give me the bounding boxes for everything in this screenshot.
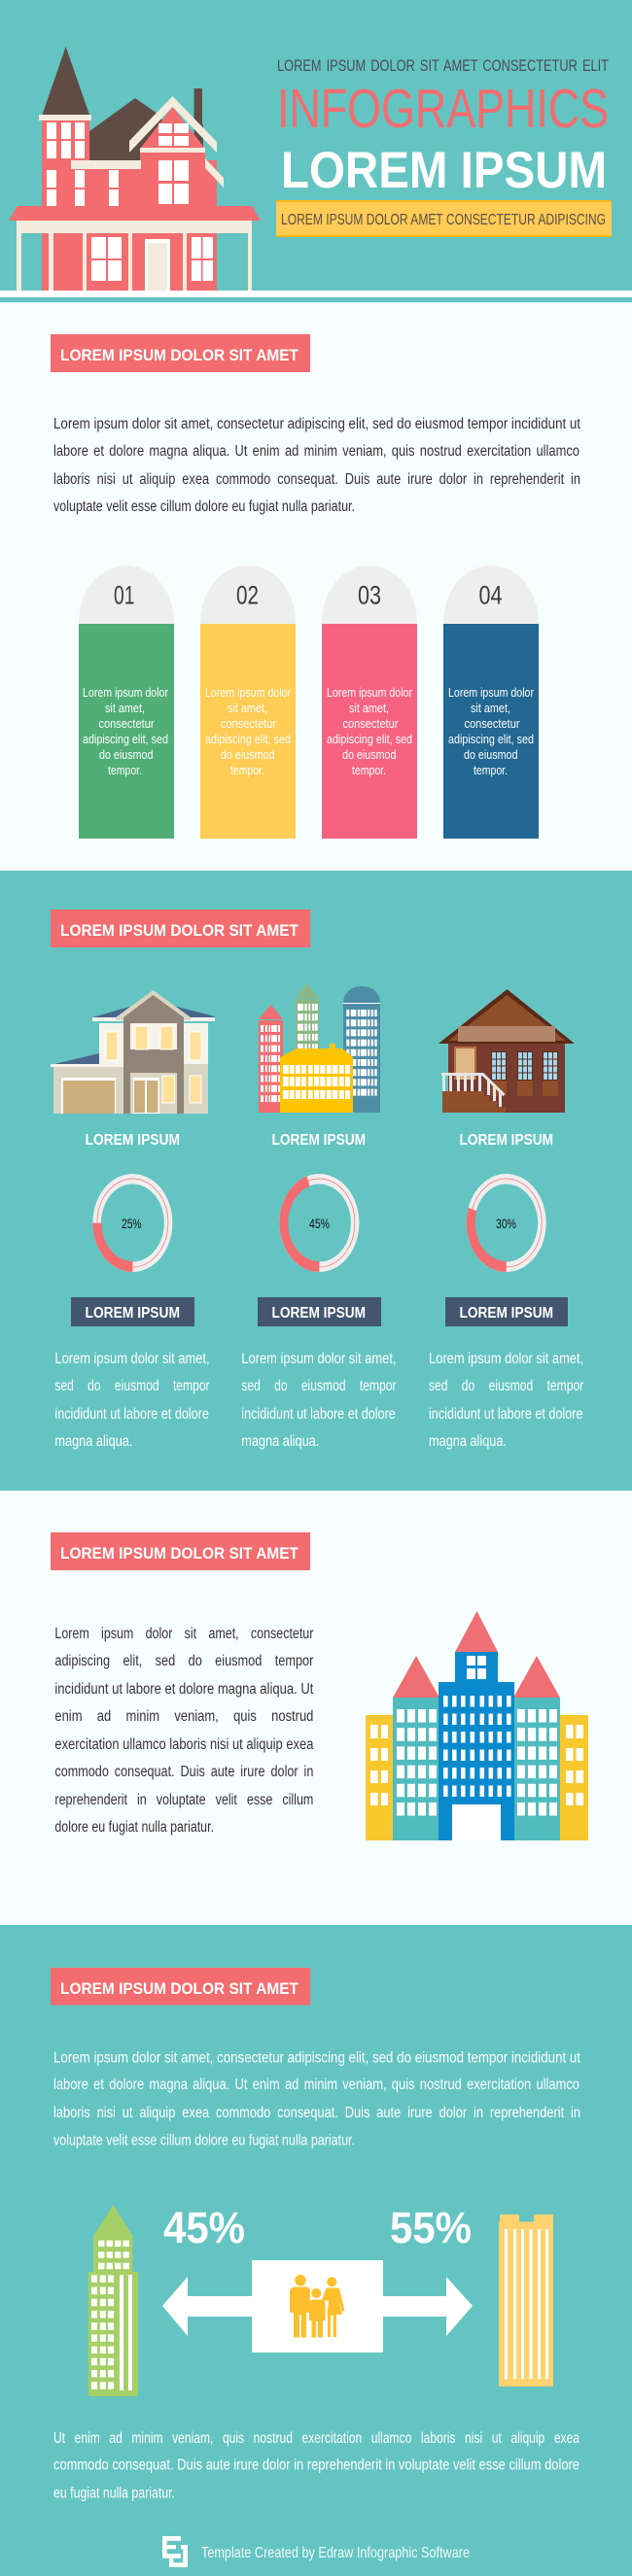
card 03: Lorem ipsum dolor — [327, 686, 412, 700]
card 03 — [322, 566, 417, 839]
card 01 — [79, 566, 174, 839]
card 04: 04 — [478, 581, 502, 610]
illustration: brown house — [439, 989, 575, 1113]
section 3 text block: exercitation ullamco laboris nisi ut aliquip exea — [54, 1736, 314, 1753]
closing text block — [53, 2430, 579, 2501]
card 03: consectetur — [342, 717, 399, 731]
donut chart 45% — [279, 1174, 359, 1272]
text column 3 — [429, 1351, 583, 1450]
section 3 heading: LOREM IPSUM DOLOR SIT AMET — [60, 1545, 298, 1563]
section 1 text block: voluptate velit esse cillum dolore eu fugiat nulla pariatur. — [53, 498, 355, 515]
donut chart 25% — [92, 1174, 172, 1272]
card 02: Lorem ipsum dolor — [205, 686, 291, 700]
illustration: suburban house — [51, 990, 215, 1114]
card 04: consectetur — [465, 717, 519, 731]
donut chart 25%: 25% — [122, 1216, 142, 1231]
card 01: tempor. — [108, 764, 142, 777]
section 3 text block: adipiscing elit, sed do eiusmod tempor — [54, 1653, 313, 1669]
text column 3: sed do eiusmod tempor — [429, 1378, 583, 1394]
dark label button 1: LOREM IPSUM — [86, 1305, 180, 1322]
dark label button 3 — [445, 1297, 568, 1326]
closing text block: eu fugiat nulla pariatur. — [53, 2486, 175, 2501]
section 4 heading — [51, 1968, 310, 2006]
section 2 heading — [51, 910, 310, 947]
section 3 text block: enim ad minim veniam, quis nostrud — [54, 1708, 313, 1725]
text column 1 — [54, 1351, 210, 1450]
text column 1: incididunt ut labore et dolore — [54, 1406, 209, 1423]
double arrow with centre box — [162, 2260, 473, 2353]
illustration: city towers — [259, 983, 380, 1113]
text column 2: Lorem ipsum dolor sit amet, — [241, 1351, 397, 1367]
donut chart 30%: 30% — [496, 1216, 516, 1231]
dark label button 2 — [258, 1297, 381, 1326]
text column 1: Lorem ipsum dolor sit amet, — [54, 1351, 210, 1367]
illustration: red house — [9, 47, 261, 291]
card 04 — [443, 566, 539, 839]
text column 3: Lorem ipsum dolor sit amet, — [429, 1351, 583, 1367]
card 03: 03 — [358, 581, 381, 610]
text column 2: sed do eiusmod tempor — [241, 1378, 397, 1394]
card 02 — [200, 566, 296, 839]
card 01: consectetur — [99, 717, 154, 731]
card 03: sit amet, — [349, 702, 389, 715]
section 3 text block: incididunt ut labore et dolore magna aliqua. Ut — [54, 1681, 314, 1698]
percentage 55%: 55% — [390, 2203, 472, 2252]
card 04: tempor. — [474, 764, 508, 777]
text column 2: magna aliqua. — [241, 1433, 319, 1450]
text column 1: sed do eiusmod tempor — [54, 1378, 210, 1394]
section 1 heading — [51, 334, 310, 372]
section 4 heading: LOREM IPSUM DOLOR SIT AMET — [60, 1980, 298, 1998]
labels under illustrations: LOREM IPSUM — [459, 1132, 553, 1149]
card 02: 02 — [236, 581, 259, 610]
section 3 text block — [54, 1626, 314, 1836]
donut chart 30% — [467, 1174, 546, 1272]
text column 1: magna aliqua. — [54, 1433, 132, 1450]
card 03: tempor. — [352, 764, 386, 777]
dark label button 3: LOREM IPSUM — [459, 1305, 553, 1322]
section 4 text block — [53, 2050, 581, 2149]
card 02: sit amet, — [228, 702, 267, 715]
card 03: adipiscing elit, sed — [327, 733, 412, 746]
text column 3: magna aliqua. — [429, 1433, 507, 1450]
panel: header — [0, 0, 632, 302]
panel: section 1 — [51, 334, 581, 839]
section 1 heading: LOREM IPSUM DOLOR SIT AMET — [60, 347, 298, 364]
panel: section 3 — [51, 1532, 588, 1840]
card 03: do eiusmod — [342, 748, 397, 762]
card 01: sit amet, — [105, 702, 145, 715]
card 04: do eiusmod — [464, 748, 518, 762]
section 3 text block: commodo consequat. Duis aute irure dolor in — [54, 1764, 313, 1780]
card 04: Lorem ipsum dolor — [448, 686, 534, 700]
illustration: castle-like building — [366, 1611, 588, 1840]
card 04: sit amet, — [471, 702, 510, 715]
card 02: consectetur — [221, 717, 276, 731]
card 01: adipiscing elit, sed — [83, 733, 168, 746]
section 2 heading: LOREM IPSUM DOLOR SIT AMET — [60, 922, 298, 940]
dark label button 2: LOREM IPSUM — [272, 1305, 366, 1322]
section 3 text block: Lorem ipsum dolor sit amet, consectetur — [54, 1626, 313, 1642]
labels under illustrations: LOREM IPSUM — [272, 1132, 366, 1149]
section 3 text block: reprehenderit in voluptate velit esse cillum — [54, 1792, 313, 1808]
labels under illustrations: LOREM IPSUM — [86, 1132, 180, 1149]
icon: family — [290, 2275, 344, 2338]
illustration: yellow tower — [499, 2215, 553, 2387]
section 4 text block: voluptate velit esse cillum dolore eu fugiat nulla pariatur. — [53, 2132, 355, 2149]
text column 3: incididunt ut labore et dolore — [429, 1406, 583, 1423]
text column 2: incididunt ut labore et dolore — [241, 1406, 396, 1423]
card 01: do eiusmod — [99, 748, 154, 762]
dark label button 1 — [71, 1297, 194, 1326]
donut chart 45%: 45% — [309, 1216, 330, 1231]
percentage 45%: 45% — [163, 2203, 245, 2252]
card 01: Lorem ipsum dolor — [83, 686, 168, 700]
yellow tagline bar — [276, 200, 612, 237]
panel: section 4 — [0, 1925, 632, 2576]
text column 2 — [241, 1351, 397, 1450]
card 02: adipiscing elit, sed — [205, 733, 291, 746]
section 3 text block: dolore eu fugiat nulla pariatur. — [54, 1819, 214, 1836]
footer credit: Template Created by Edraw Infographic Software — [201, 2545, 470, 2561]
card 04: adipiscing elit, sed — [448, 733, 534, 746]
card 01: 01 — [114, 581, 134, 610]
icon: edraw logo — [162, 2536, 188, 2567]
section 3 heading — [51, 1532, 310, 1570]
card 02: tempor. — [230, 764, 264, 777]
illustration: green tower — [88, 2205, 138, 2396]
labels under illustrations — [86, 1132, 553, 1149]
card 02: do eiusmod — [221, 748, 275, 762]
section 1 text block — [53, 416, 581, 515]
panel: section 2 — [0, 871, 632, 1491]
